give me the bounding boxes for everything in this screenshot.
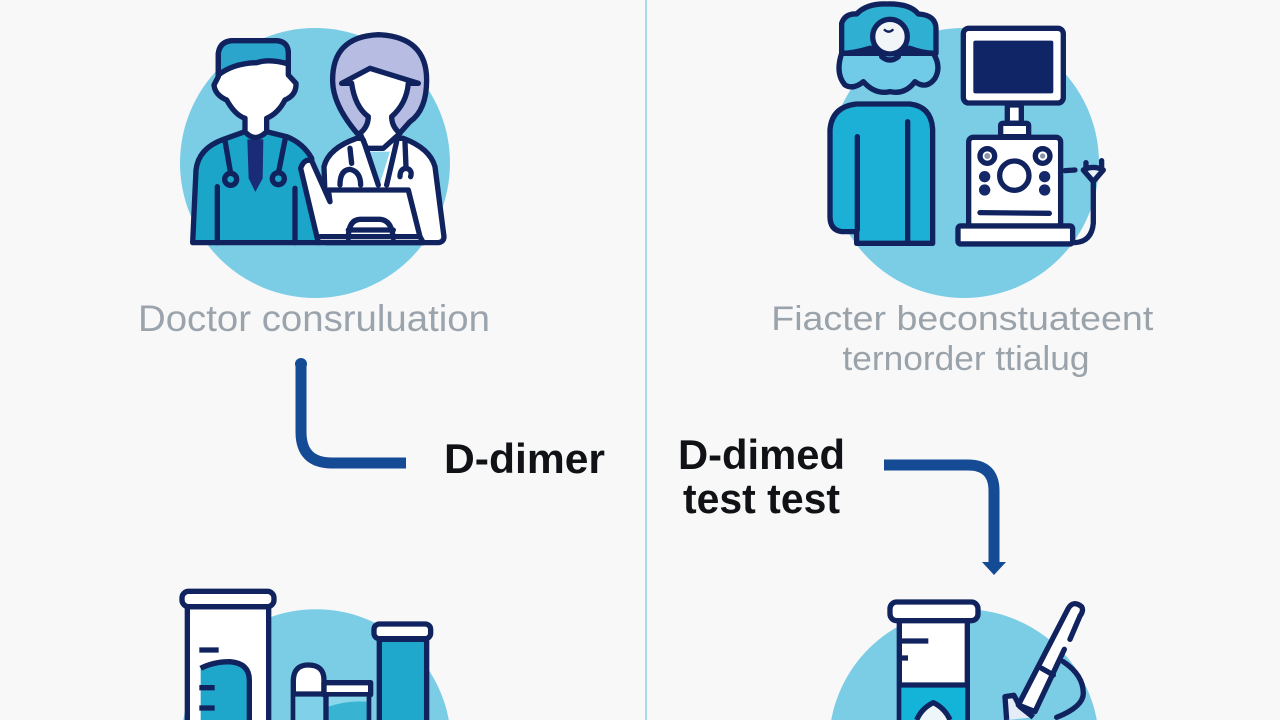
icon: test tube and swab — [890, 602, 1083, 720]
panel: imaging scan — [771, 4, 1163, 378]
label: D-dimed test test: test test — [683, 475, 840, 522]
label: D-dimed test test: D-dimed — [678, 431, 845, 478]
icon: laboratory tubes — [182, 591, 431, 720]
icon backdrop: doctor circle — [180, 28, 450, 298]
panel: doctor consultation — [138, 28, 490, 339]
icon backdrop: scanner circle — [829, 28, 1099, 298]
icon: patient and scanner machine — [830, 4, 1103, 244]
arrow: from D-dimer test to sample tube — [884, 465, 1006, 575]
icon backdrop: lab circle — [183, 609, 449, 720]
label: doctor consultation: Doctor consruluation — [138, 298, 490, 339]
icon backdrop: sample circle — [831, 609, 1097, 720]
panel: lab tubes — [182, 591, 449, 720]
label: imaging scan: ternorder ttialug — [842, 340, 1090, 378]
icon: two doctors — [193, 35, 444, 243]
panel: blood sample test — [831, 602, 1097, 720]
label: D-dimer: D-dimer — [444, 435, 605, 482]
arrow: from consultation to D-dimer — [295, 358, 406, 463]
label: imaging scan: Fiacter beconstuateent — [771, 300, 1154, 338]
